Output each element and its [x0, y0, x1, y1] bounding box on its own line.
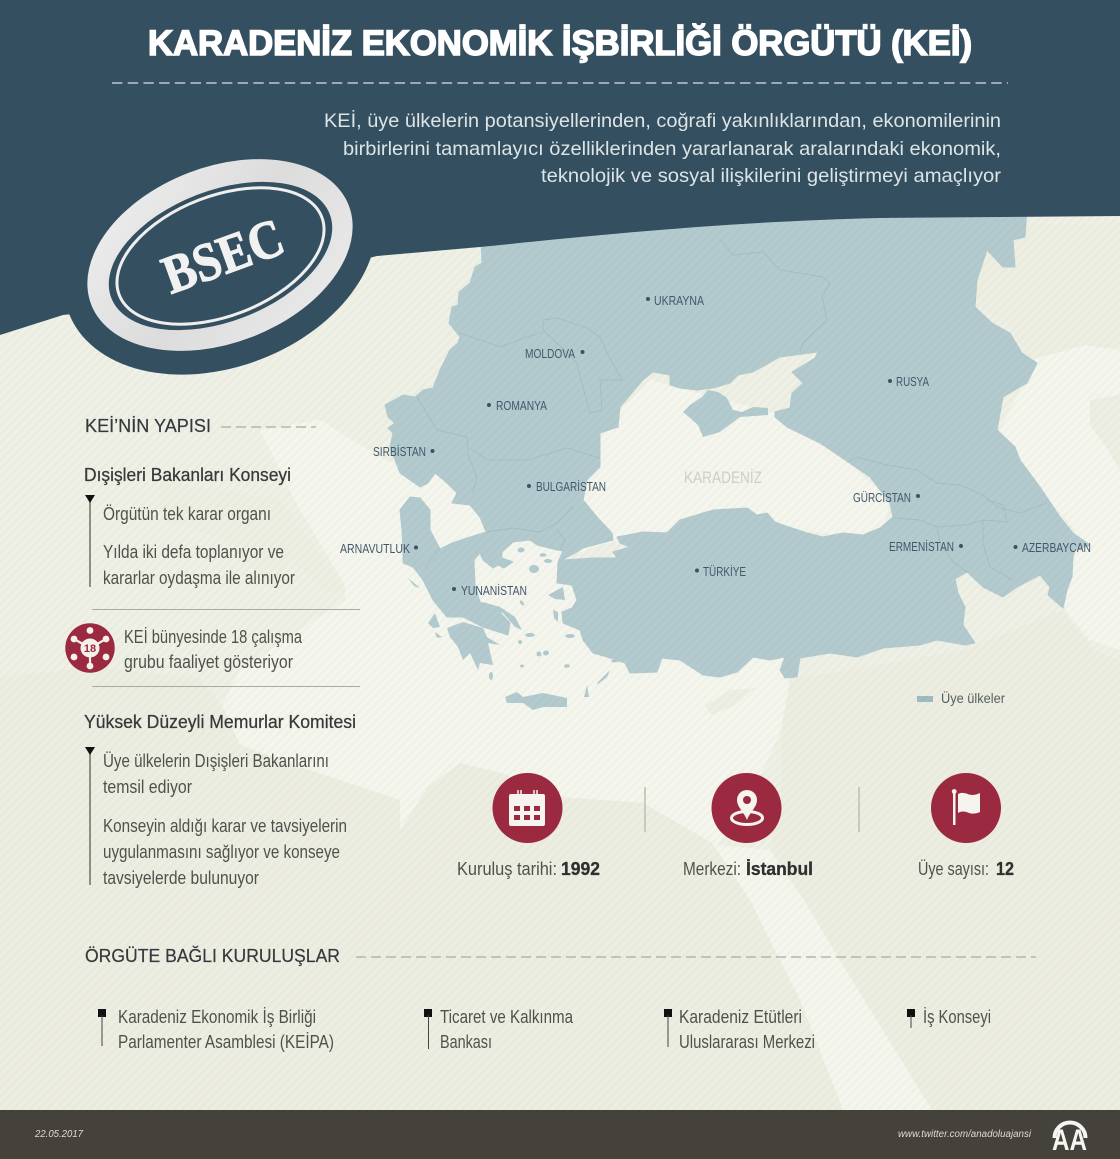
country labels: TÜRKİYE: [703, 565, 746, 579]
item: bank: [424, 1007, 574, 1052]
country labels: RUSYA: [896, 375, 930, 389]
panel: Dışişleri Bakanları Konseyi: Dışişleri Bakanları Konseyi: [84, 465, 291, 485]
stat: founding date: Kuruluş tarihi:: [457, 859, 557, 879]
title: KARADENİZ EKONOMİK İŞBİRLİĞİ ÖRGÜTÜ (KEİ): [148, 23, 972, 63]
country labels: MOLDOVA: [525, 347, 576, 361]
heading: Örgüte bağlı kuruluşlar: ÖRGÜTE BAĞLI KURULUŞLAR: [85, 945, 340, 966]
footer bar: [0, 1110, 1120, 1159]
panel: Yüksek Düzeyli Memurlar Komitesi: temsil ediyor: [103, 777, 192, 797]
country labels: SIRBİSTAN: [373, 445, 426, 459]
country labels: ERMENİSTAN: [889, 540, 954, 554]
panel: Yüksek Düzeyli Memurlar Komitesi: Üye ülkelerin Dışişleri Bakanlarını: [103, 751, 329, 771]
country labels: GÜRCİSTAN: [853, 491, 911, 505]
country labels: ROMANYA: [496, 399, 548, 413]
item: business council: İş Konseyi: [923, 1007, 991, 1027]
item: research centre: [664, 1007, 815, 1052]
map: member countries: [340, 210, 1091, 710]
legend: [917, 689, 1005, 706]
icon: map pin: [712, 773, 782, 843]
stat: member count: 12: [996, 859, 1014, 879]
panel: Yüksek Düzeyli Memurlar Komitesi: [84, 712, 356, 888]
divider: [644, 787, 646, 832]
country labels: AZERBAYCAN: [1022, 541, 1091, 555]
item: KEİPA: [98, 1007, 334, 1052]
divider: [858, 787, 860, 832]
stat: member count: Üye sayısı:: [918, 859, 989, 879]
country labels: BULGARİSTAN: [536, 480, 606, 494]
timeline marker: [85, 747, 95, 885]
country labels: YUNANİSTAN: [461, 584, 527, 598]
callout: 18 çalışma grubu: grubu faaliyet gösteriyor: [124, 652, 293, 672]
title dashed rule: [112, 82, 1008, 84]
panel: Yüksek Düzeyli Memurlar Komitesi: uygulanmasını sağlıyor ve konseye: [103, 842, 340, 862]
logo: AA: AA: [1052, 1124, 1087, 1157]
BSEC oval logo: [60, 123, 380, 387]
header band: [0, 0, 1120, 418]
timeline marker: [85, 495, 95, 587]
intro paragraph: KEİ, üye ülkelerin potansiyellerinden, coğrafi yakınlıklarından, ekonomilerinin: [324, 109, 1001, 132]
panel: Dışişleri Bakanları Konseyi: Yılda iki defa toplanıyor ve: [103, 542, 284, 562]
intro paragraph: teknolojik ve sosyal ilişkilerini geliştirmeyi amaçlıyor: [541, 165, 1002, 187]
item: research centre: Karadeniz Etütleri: [679, 1007, 802, 1027]
callout: 18 çalışma grubu: KEİ bünyesinde 18 çalışma: [124, 627, 303, 647]
panel: Dışişleri Bakanları Konseyi: Örgütün tek karar organı: [103, 504, 271, 524]
icon: calendar: [492, 773, 562, 843]
BSEC oval logo: BSEC: [154, 207, 292, 305]
national borders: [417, 240, 1047, 580]
stat: headquarters: İstanbul: [746, 859, 813, 879]
stat: headquarters: Merkezi:: [683, 859, 741, 879]
item: business council: [907, 1007, 991, 1028]
heading: KEİ'nin yapısı: KEİ’NİN YAPISI: [85, 416, 211, 436]
item: bank: Ticaret ve Kalkınma: [440, 1007, 574, 1027]
panel: Dışişleri Bakanları Konseyi: [84, 465, 295, 588]
date: 22.05.2017: [34, 1129, 83, 1140]
stat: founding date: [457, 773, 600, 879]
icon: network 18: [65, 623, 115, 673]
main land mass of member states: [385, 210, 1090, 678]
callout: 18 çalışma grubu: [65, 610, 360, 686]
item: research centre: Uluslararası Merkezi: [679, 1032, 815, 1052]
Crimea: [683, 390, 768, 437]
item: KEİPA: Karadeniz Ekonomik İş Birliği: [118, 1007, 316, 1027]
country labels: UKRAYNA: [654, 294, 705, 308]
icon: network 18: 18: [84, 643, 96, 655]
panel: Yüksek Düzeyli Memurlar Komitesi: tavsiyelerde bulunuyor: [103, 868, 259, 888]
intro paragraph: birbirlerini tamamlayıcı özelliklerinden yararlanarak aralarındaki ekonomik,: [343, 138, 1001, 160]
sea label: KARADENİZ: [684, 468, 762, 487]
panel: Yüksek Düzeyli Memurlar Komitesi: Konseyin aldığı karar ve tavsiyelerin: [103, 816, 347, 836]
item: KEİPA: Parlamenter Asamblesi (KEİPA): [118, 1032, 334, 1052]
Greek islands: [408, 548, 619, 710]
panel: Yüksek Düzeyli Memurlar Komitesi: Yüksek Düzeyli Memurlar Komitesi: [84, 712, 356, 732]
country labels: [340, 294, 1091, 598]
intro paragraph: [324, 109, 1002, 187]
icon: flag: [931, 773, 1001, 843]
item: bank: Bankası: [440, 1032, 492, 1052]
legend: Üye ülkeler: [941, 689, 1005, 706]
stat: member count: [918, 773, 1014, 879]
country labels: ARNAVUTLUK: [340, 542, 411, 556]
panel: Dışişleri Bakanları Konseyi: kararlar oydaşma ile alınıyor: [103, 568, 295, 588]
twitter url: www.twitter.com/anadoluajansi: [898, 1129, 1032, 1140]
stat: headquarters: [683, 773, 813, 879]
stat: founding date: 1992: [561, 859, 600, 879]
